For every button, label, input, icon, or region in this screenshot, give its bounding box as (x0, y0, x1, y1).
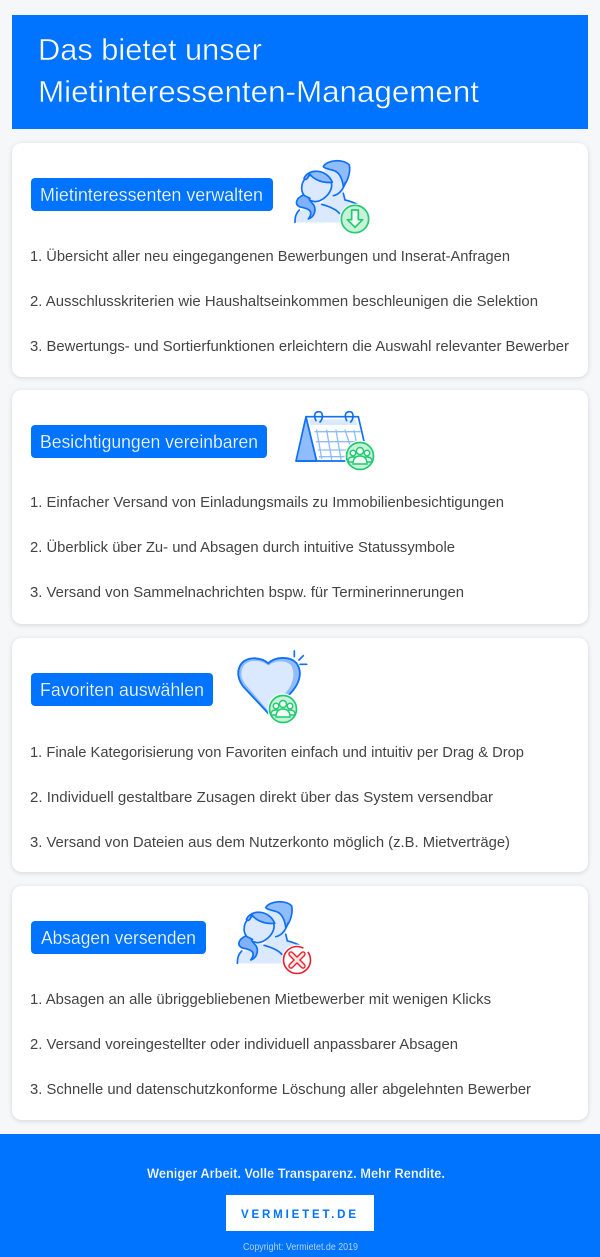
list: 3. Bewertungs- und Sortierfunktionen erleichtern die Auswahl relevanter Bewerber (30, 339, 569, 355)
panel: Absagen versenden (12, 886, 588, 1120)
footer (0, 1134, 600, 1257)
button: VERMIETET.DE: VERMIETET.DE (241, 1209, 356, 1221)
header banner (12, 15, 588, 129)
list: 3. Schnelle und datenschutzkonforme Löschung aller abgelehnten Bewerber (30, 1082, 531, 1098)
list: 2. Individuell gestaltbare Zusagen direkt über das System versendbar (30, 790, 493, 806)
list: 2. Überblick über Zu- und Absagen durch intuitive Statussymbole (30, 538, 455, 556)
title: Das bietet unser (38, 32, 262, 67)
icon: calendar (296, 412, 366, 461)
title: Mietinteressenten-Management (38, 74, 479, 109)
heading pill (31, 178, 273, 211)
heading pill: Absagen versenden (41, 928, 196, 948)
list (30, 992, 531, 1098)
heading pill: Mietinteressenten verwalten (40, 185, 263, 205)
panel: Besichtigungen vereinbaren (12, 390, 588, 624)
icon badge: people (344, 440, 376, 472)
button: VERMIETET.DE (226, 1195, 374, 1231)
list: 1. Übersicht aller neu eingegangenen Bewerbungen und Inserat-Anfragen (30, 247, 510, 265)
icon: heart with sparkle (238, 651, 307, 713)
icon badge: reject (282, 944, 312, 976)
heading pill: Besichtigungen vereinbaren (40, 432, 258, 452)
icon: two people (295, 161, 365, 222)
heading pill (31, 425, 267, 458)
panel: Favoriten auswählen (12, 638, 588, 872)
list: 1. Finale Kategorisierung von Favoriten einfach und intuitiv per Drag & Drop (30, 745, 524, 761)
heading pill (31, 921, 206, 954)
list: 3. Versand von Dateien aus dem Nutzerkonto möglich (z.B. Mietverträge) (30, 835, 510, 851)
icon: two people (237, 902, 307, 963)
icon badge: people (268, 694, 298, 724)
list: 2. Versand voreingestellter oder individuell anpassbarer Absagen (30, 1037, 458, 1053)
copyright: Copyright: Vermietet.de 2019 (243, 1242, 358, 1253)
list: 2. Ausschlusskriterien wie Haushaltseinkommen beschleunigen die Selektion (30, 294, 538, 310)
list: 1. Einfacher Versand von Einladungsmails zu Immobilienbesichtigungen (30, 495, 504, 511)
slogan: Weniger Arbeit. Volle Transparenz. Mehr Rendite. (147, 1166, 445, 1181)
list: 1. Absagen an alle übriggebliebenen Mietbewerber mit wenigen Klicks (30, 992, 491, 1008)
list (30, 247, 569, 355)
title (38, 32, 479, 109)
panel: Mietinteressenten verwalten (12, 143, 588, 377)
list: 3. Versand von Sammelnachrichten bspw. für Terminerinnerungen (30, 585, 464, 601)
list (30, 745, 524, 851)
icon badge: download (340, 204, 370, 234)
list (30, 495, 504, 601)
heading pill: Favoriten auswählen (40, 680, 204, 700)
heading pill (31, 673, 213, 706)
